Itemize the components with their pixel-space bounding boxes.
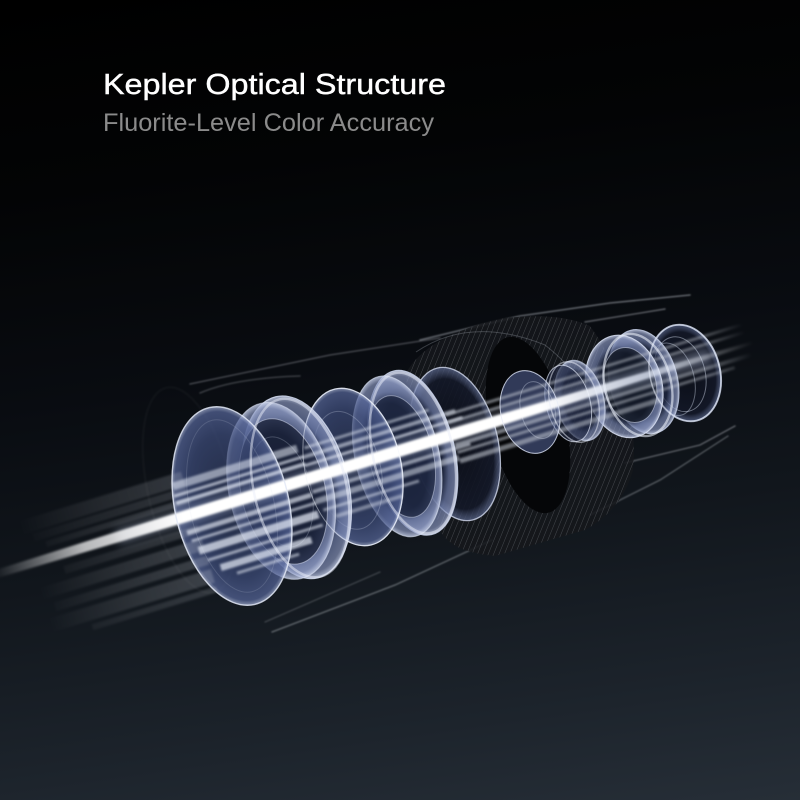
lens 4 thick element (337, 361, 473, 548)
core white beam (0, 337, 755, 581)
lens 1 front element (154, 395, 310, 617)
core beam glow (115, 349, 712, 544)
outer lens barrel outline (125, 295, 735, 632)
rear lens rims (492, 364, 568, 460)
lens 6 (492, 364, 568, 460)
lens 2 thick element (210, 385, 368, 593)
left incoming streaks (18, 472, 218, 642)
lens 8 (574, 322, 689, 447)
hatched barrel section (405, 316, 634, 556)
right outgoing streaks (446, 323, 757, 463)
lens 3 (288, 378, 418, 556)
rear lens group fills (154, 317, 731, 617)
streaks crossing front lenses (170, 396, 487, 586)
lens 7 (537, 355, 613, 449)
lens 5 (396, 358, 514, 530)
subtitle: Fluorite-Level Color Accuracy (103, 109, 435, 137)
lens rim highlights (154, 317, 731, 617)
barrel dark interior (471, 329, 585, 521)
light beams along optical axis (0, 301, 777, 654)
thick element rims (235, 389, 365, 587)
title: Kepler Optical Structure (103, 69, 446, 101)
lens 9 (638, 317, 731, 429)
front lens rim (154, 395, 310, 617)
